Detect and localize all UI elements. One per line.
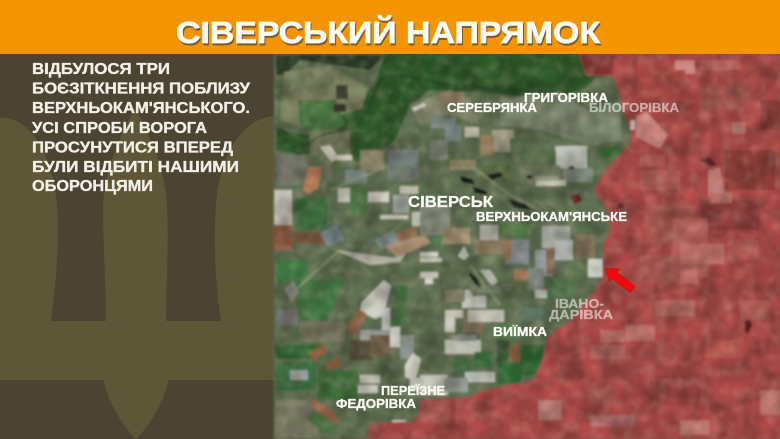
map labels bbox=[336, 90, 680, 411]
forest bbox=[276, 54, 600, 165]
ponds and river bbox=[460, 166, 574, 210]
map labels: ІВАНО- bbox=[555, 296, 604, 311]
map labels: ВЕРХНЬОКАМ'ЯНСЬКЕ bbox=[476, 210, 627, 224]
occupied territory bbox=[367, 54, 780, 439]
body text: БУЛИ ВІДБИТІ НАШИМИ bbox=[32, 159, 239, 176]
body text bbox=[32, 61, 250, 195]
map labels: СЕРЕБРЯНКА bbox=[447, 100, 538, 115]
left panel bbox=[0, 54, 274, 439]
map labels: ПЕРЕЇЗНЕ bbox=[381, 383, 445, 398]
body text: БОЄЗІТКНЕННЯ ПОБЛИЗУ bbox=[32, 80, 250, 98]
map labels: ВИЇМКА bbox=[493, 324, 548, 339]
title: СІВЕРСЬКИЙ НАПРЯМОК bbox=[176, 14, 600, 50]
map labels: БІЛОГОРІВКА bbox=[589, 100, 680, 115]
satellite map bbox=[274, 54, 780, 439]
body text: УСІ СПРОБИ ВОРОГА bbox=[32, 120, 207, 137]
body text: ВЕРХНЬОКАМ'ЯНСЬКОГО. bbox=[32, 100, 250, 117]
map labels: ДАРІВКА bbox=[549, 307, 614, 322]
map labels: ГРИГОРІВКА bbox=[524, 90, 609, 105]
photographic mottling bbox=[274, 54, 780, 439]
body text: ОБОРОНЦЯМИ bbox=[32, 178, 153, 195]
trident emblem bbox=[0, 108, 274, 439]
fields east of Siversk bbox=[420, 205, 450, 235]
fields centre south bbox=[445, 340, 481, 354]
header bar bbox=[0, 0, 780, 54]
map labels: ФЕДОРІВКА bbox=[336, 396, 417, 411]
map labels: СІВЕРСЬК bbox=[408, 194, 494, 211]
fields north bbox=[274, 118, 604, 439]
fields west bbox=[276, 260, 306, 282]
body text: ВІДБУЛОСЯ ТРИ bbox=[32, 61, 170, 78]
body text: ПРОСУНУТИСЯ ВПЕРЕД bbox=[32, 140, 233, 156]
arrow: attack direction bbox=[600, 262, 638, 296]
